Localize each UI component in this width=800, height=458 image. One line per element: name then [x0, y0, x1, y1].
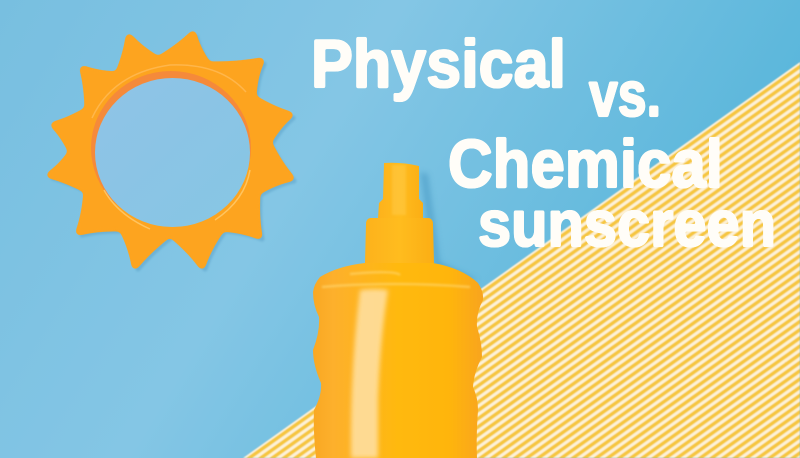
icon: orange sun toy [50, 34, 294, 269]
title line: vs.: vs. [589, 60, 661, 130]
bottle body [313, 263, 483, 458]
spray collar [365, 218, 434, 263]
striped yellow diagonal panel [243, 62, 800, 458]
title line: Physical: Physical [311, 26, 566, 102]
title line: sunscreen: sunscreen [478, 187, 776, 260]
shoulder rib [322, 272, 470, 287]
icon: sunscreen spray bottle [313, 163, 483, 458]
title [311, 26, 776, 260]
nozzle [378, 163, 423, 218]
bottle highlight [351, 289, 388, 458]
title line: Chemical: Chemical [448, 126, 723, 202]
